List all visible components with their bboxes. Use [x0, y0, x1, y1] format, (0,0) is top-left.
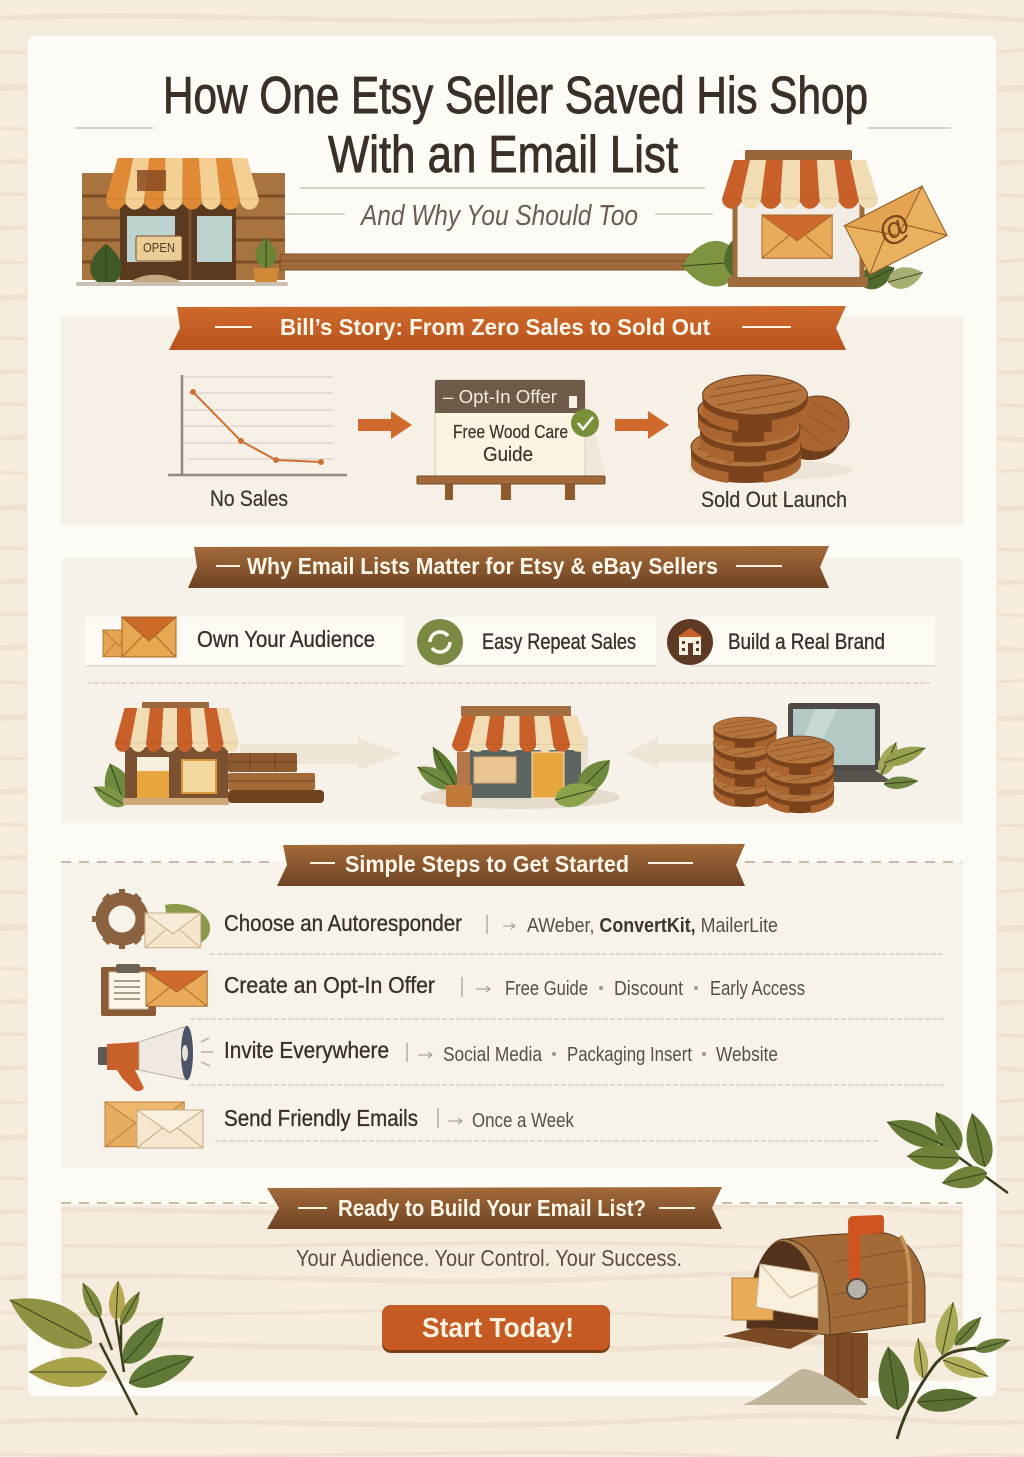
button: start today: Start Today! — [422, 1312, 574, 1343]
banner: ready to build — [267, 1187, 722, 1229]
step: create an opt-in offer: Early Access — [710, 978, 805, 1000]
illustration: email shop: @ — [872, 205, 916, 251]
illustration: email shop — [681, 150, 947, 294]
step: choose an autoresponder — [92, 889, 778, 949]
wood slice stack — [688, 375, 852, 483]
label: no sales: No Sales — [210, 486, 288, 511]
button: start today — [382, 1305, 610, 1353]
tagline: Your Audience. Your Control. Your Success. — [296, 1245, 682, 1271]
opt-in offer board: Guide — [483, 444, 533, 466]
card: own your audience: Own Your Audience — [197, 626, 375, 652]
step: invite everywhere — [98, 1026, 778, 1091]
step: invite everywhere: Invite Everywhere — [224, 1037, 389, 1063]
step: create an opt-in offer: Create an Opt-In Offer — [224, 972, 435, 998]
step: choose an autoresponder: AWeber, ConvertKit, MailerLite — [527, 915, 778, 937]
mailbox — [723, 1215, 925, 1405]
title: With an Email List — [328, 126, 678, 184]
illustration: connecting beam — [280, 254, 692, 270]
title: How One Etsy Seller Saved His Shop — [163, 67, 868, 125]
leaf sprig: upper right — [883, 1106, 1008, 1193]
opt-in offer board: Free Wood Care — [453, 422, 568, 442]
banner: why email lists matter: Why Email Lists Matter for Etsy & eBay Sellers — [247, 553, 718, 579]
title — [163, 67, 868, 184]
opt-in offer board: – Opt-In Offer — [443, 387, 557, 407]
step: create an opt-in offer: Free Guide — [505, 978, 588, 1000]
step: invite everywhere: Packaging Insert — [567, 1044, 692, 1066]
chart: falling sales — [168, 375, 347, 475]
step: send friendly emails: Once a Week — [472, 1110, 575, 1132]
card: own your audience — [85, 617, 404, 667]
banner: Bill's story: Bill’s Story: From Zero Sales to Sold Out — [280, 314, 710, 340]
illustration: central shop — [413, 706, 620, 811]
step: create an opt-in offer: Discount — [614, 978, 683, 1000]
card: easy repeat sales: Easy Repeat Sales — [482, 629, 636, 654]
illustration: arrow pointing to shop — [625, 738, 712, 768]
card: build a real brand: Build a Real Brand — [728, 629, 885, 654]
subtitle: And Why You Should Too — [359, 200, 638, 232]
illustration: shop with wood planks — [90, 702, 403, 812]
panel: call to action — [61, 1187, 963, 1381]
step: invite everywhere: Social Media — [443, 1044, 543, 1066]
illustration: wood stacks and laptop — [713, 703, 928, 813]
panel: Bill's story — [61, 306, 963, 525]
arrow — [615, 411, 669, 439]
banner: simple steps — [277, 844, 745, 886]
opt-in offer board — [417, 380, 606, 500]
panel: why email lists matter — [61, 546, 963, 823]
banner: Bill's story — [169, 306, 846, 350]
subtitle — [75, 128, 951, 232]
banner: ready to build: Ready to Build Your Email List? — [338, 1195, 646, 1221]
step: invite everywhere: Website — [716, 1044, 778, 1066]
label: sold out launch: Sold Out Launch — [701, 487, 847, 512]
illustration: wooden shop — [76, 158, 288, 286]
arrow — [358, 411, 412, 439]
step: send friendly emails — [105, 1102, 575, 1148]
step: choose an autoresponder: Choose an Autoresponder — [224, 910, 462, 936]
step: create an opt-in offer — [101, 964, 805, 1016]
banner: why email lists matter — [188, 546, 829, 588]
panel: simple steps — [61, 844, 963, 1167]
card: build a real brand — [667, 617, 935, 667]
leaf sprig: lower left — [1, 1280, 199, 1415]
banner: simple steps: Simple Steps to Get Started — [345, 851, 629, 877]
card: easy repeat sales — [417, 617, 656, 667]
step: send friendly emails: Send Friendly Emails — [224, 1105, 418, 1131]
leaf sprig: lower right — [873, 1300, 1011, 1439]
illustration: wooden shop: OPEN — [143, 240, 175, 255]
